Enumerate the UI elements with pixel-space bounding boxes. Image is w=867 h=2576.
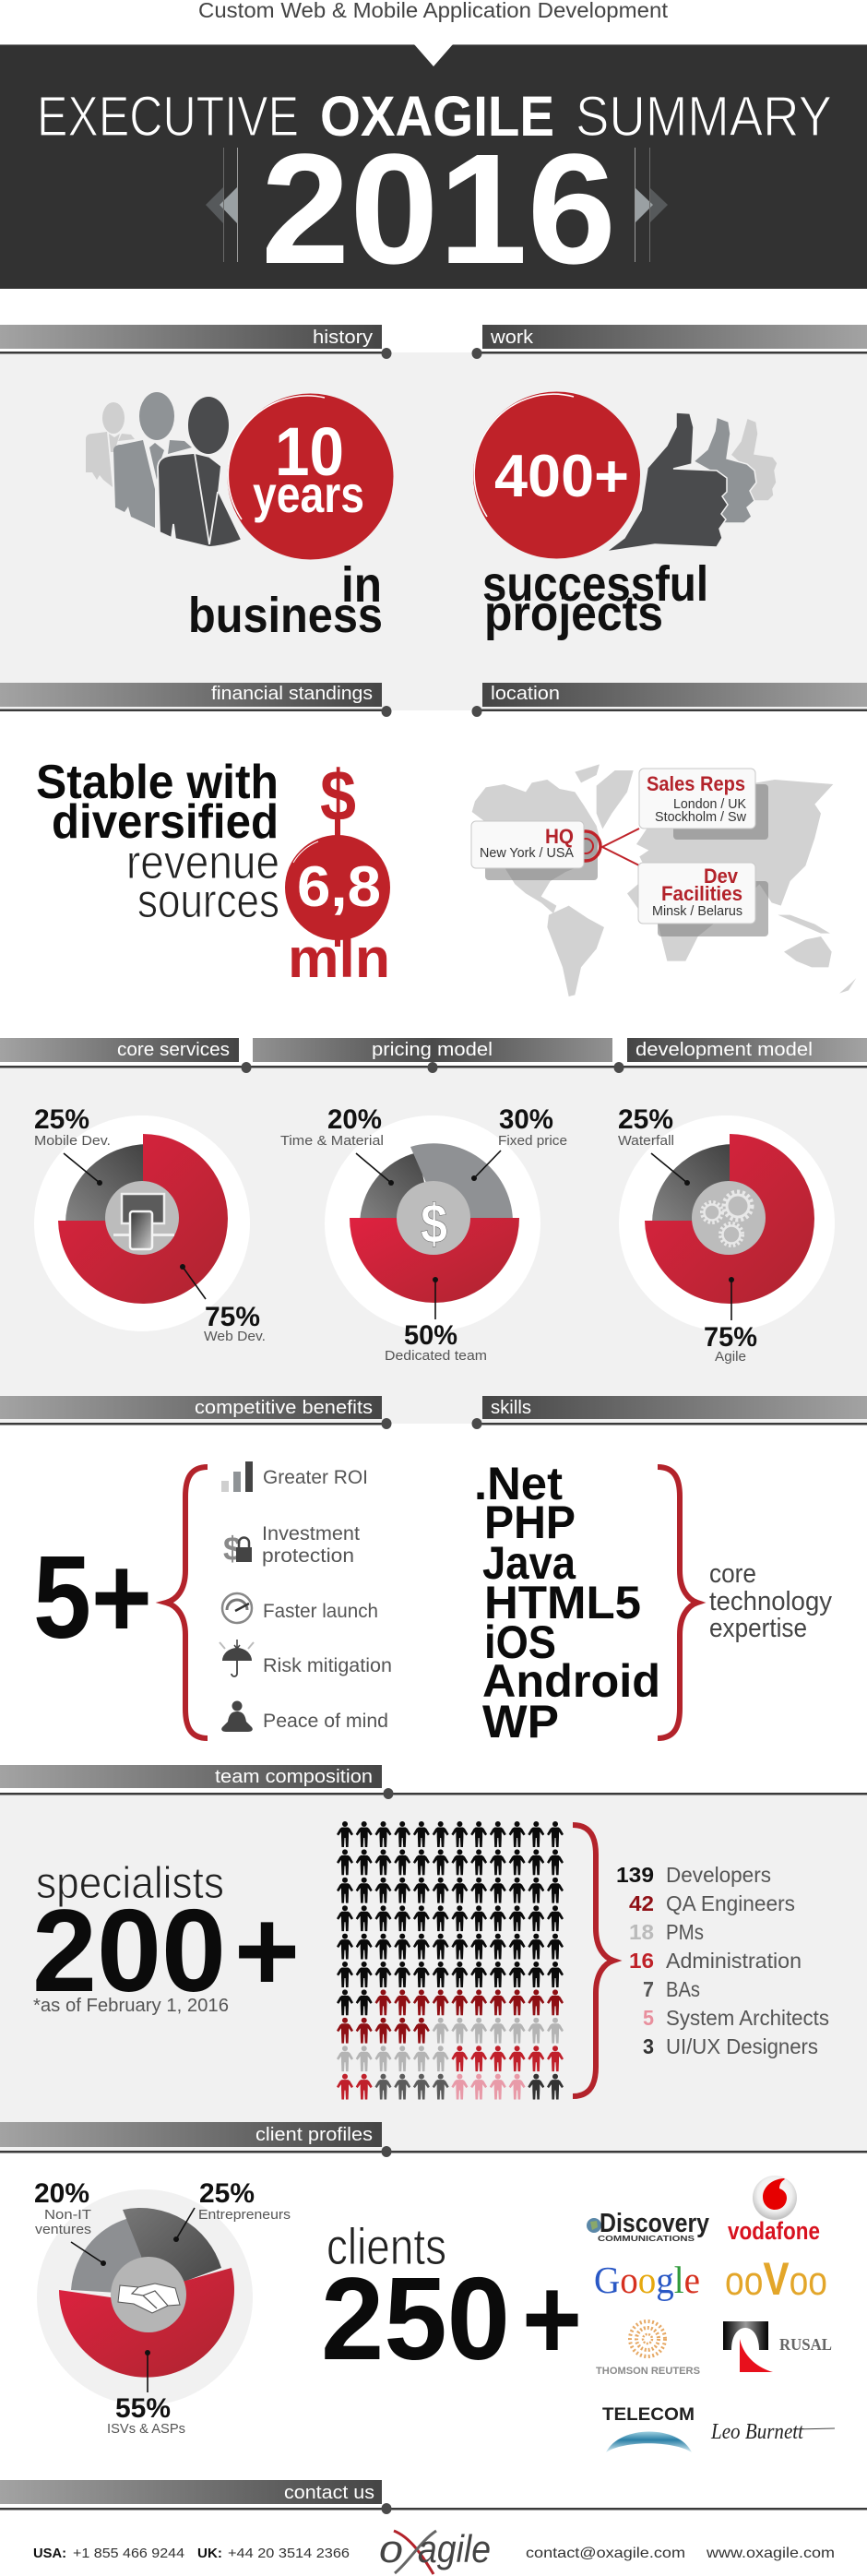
chart: development model xyxy=(618,1104,835,1365)
logo: Vodafone: vodafone xyxy=(728,2217,820,2245)
callout: entrepreneurs: Entrepreneurs xyxy=(198,2207,291,2223)
BAs xyxy=(374,2074,449,2100)
thumb: middle xyxy=(694,417,756,523)
administration xyxy=(337,2045,564,2100)
benefit: investment protection: protection xyxy=(262,1545,354,1567)
text: in business: business xyxy=(188,588,383,643)
team role list: Developers xyxy=(666,1863,771,1887)
text: stable with diversified revenue sources xyxy=(36,756,279,928)
benefit: investment protection: Investment xyxy=(262,1523,360,1544)
grey background: history and work xyxy=(0,352,867,710)
benefit: faster launch xyxy=(222,1593,378,1623)
logo: Vodafone xyxy=(728,2176,820,2245)
callout: web dev xyxy=(180,1264,266,1344)
contact phones: UK: xyxy=(197,2546,222,2561)
text: core technology expertise: expertise xyxy=(709,1614,807,1643)
text: stable with diversified revenue sources: diversified xyxy=(52,795,279,849)
grey background: team xyxy=(0,1794,867,2152)
text: stable with diversified revenue sources: Stable with xyxy=(36,756,279,809)
benefit: risk mitigation: Risk mitigation xyxy=(263,1655,392,1676)
icon: business people xyxy=(86,392,242,547)
contact web: contact@oxagile.com xyxy=(526,2546,685,2561)
title xyxy=(37,85,832,148)
text: specialists 200+ xyxy=(32,1859,300,2016)
skills list: WP xyxy=(482,1696,559,1747)
person: middle xyxy=(113,392,192,528)
connector lines xyxy=(602,829,639,865)
logo: Discovery: COMMUNICATIONS xyxy=(598,2235,695,2243)
callout: sales reps: Sales Reps xyxy=(647,772,745,795)
badge: 10 years xyxy=(225,391,397,563)
callout: mobile dev: Mobile Dev. xyxy=(34,1133,111,1149)
text: specialists 200+: specialists xyxy=(36,1859,224,1908)
team role list: 3 xyxy=(643,2034,654,2058)
person: back xyxy=(86,402,135,487)
section header: work: work xyxy=(490,328,534,348)
text: core technology expertise: technology xyxy=(709,1587,832,1616)
callout: web dev: 75% xyxy=(205,1302,260,1332)
team role list: UI/UX Designers xyxy=(666,2034,818,2058)
callout: HQ: New York / USA xyxy=(480,845,574,861)
logo: Leo Burnett: Leo Burnett xyxy=(710,2420,804,2444)
callout: agile: 75% xyxy=(704,1322,757,1353)
icon: thumbs up xyxy=(606,412,778,552)
benefit: risk mitigation xyxy=(220,1640,392,1676)
logo: ooVoo: ooVoo xyxy=(725,2253,827,2305)
UI/UX designers xyxy=(528,2074,564,2100)
benefit: greater ROI xyxy=(221,1461,368,1492)
logo: Thomson Reuters: THOMSON REUTERS xyxy=(596,2366,700,2377)
team role list: 7 xyxy=(643,1977,654,2001)
title: SUMMARY xyxy=(576,85,832,148)
bracket: skills xyxy=(658,1467,697,1738)
contact phones: +44 20 3514 2366 xyxy=(228,2546,350,2561)
world map xyxy=(472,764,856,996)
callout: agile xyxy=(704,1277,757,1365)
benefit: peace of mind xyxy=(221,1701,388,1732)
bracket: benefits xyxy=(166,1467,208,1738)
text: successful projects xyxy=(482,556,708,641)
pictogram: team xyxy=(337,1821,564,2100)
contact web: www.oxagile.com xyxy=(706,2546,835,2561)
services rule with dots xyxy=(0,1062,867,1073)
team role list: QA Engineers xyxy=(666,1891,795,1915)
text: successful projects: successful xyxy=(482,556,708,612)
revenue badge: 6,8 mln: mln xyxy=(288,927,390,989)
benefit: peace of mind: Peace of mind xyxy=(263,1711,388,1732)
badge: 10 years: 10 xyxy=(275,413,344,490)
person: front xyxy=(158,397,242,547)
PMs xyxy=(337,2018,564,2071)
logo: Rusal xyxy=(723,2321,832,2372)
logo: Google: Google xyxy=(594,2259,700,2301)
text: clients 250+: 250 xyxy=(321,2253,510,2384)
logo: Telecom: TELECOM xyxy=(602,2405,695,2425)
text: in business: in xyxy=(341,557,382,613)
skills list: Java xyxy=(482,1537,576,1589)
logo: Thomson Reuters xyxy=(596,2321,700,2377)
QA engineers xyxy=(337,1989,564,2044)
callout: mobile dev xyxy=(34,1104,111,1186)
title: EXECUTIVE xyxy=(37,85,299,148)
section header: team composition: team composition xyxy=(215,1767,373,1787)
skills list: .Net xyxy=(474,1458,563,1509)
callout: fixed price: Fixed price xyxy=(498,1133,567,1149)
callout: fixed price xyxy=(471,1104,567,1181)
callout: agile: Agile xyxy=(715,1349,746,1365)
year: 2016 xyxy=(261,122,616,297)
contact phones xyxy=(33,2546,350,2561)
skills list: PHP xyxy=(484,1497,576,1548)
logo: Rusal: RUSAL xyxy=(779,2335,832,2354)
logo: Oxagile: o xyxy=(379,2527,403,2570)
icon: dollar: $ xyxy=(421,1193,447,1255)
section header: pricing model: pricing model xyxy=(372,1040,493,1060)
badge: 400+ xyxy=(470,389,642,561)
callout: non-IT ventures xyxy=(34,2178,106,2266)
callout: dev facilities: Minsk / Belarus xyxy=(652,903,742,919)
callout: waterfall: Waterfall xyxy=(618,1133,674,1149)
callout: dedicated team: Dedicated team xyxy=(385,1348,487,1364)
callout: ISVs and ASPs: 55% xyxy=(115,2393,171,2424)
team role list: System Architects xyxy=(666,2006,829,2030)
logo: Oxagile: agile xyxy=(418,2527,491,2570)
team role list: 18 xyxy=(629,1920,654,1944)
text: clients 250+ xyxy=(321,2217,582,2384)
logo: Telecom xyxy=(602,2405,695,2452)
skills list: iOS xyxy=(484,1616,556,1668)
callout: fixed price: 30% xyxy=(499,1104,553,1135)
icon: gears xyxy=(702,1192,752,1246)
logo: Discovery: Discovery xyxy=(600,2209,709,2238)
callout: mobile dev: 25% xyxy=(34,1104,89,1135)
team role list: 42 xyxy=(629,1891,654,1915)
icon: devices xyxy=(113,1194,174,1249)
text: in business xyxy=(188,557,383,643)
text: core technology expertise xyxy=(709,1559,832,1643)
team role list xyxy=(616,1863,829,2058)
benefit: investment protection: $ xyxy=(223,1530,242,1568)
section header: financial standings: financial standings xyxy=(211,684,373,704)
benefit: faster launch: Faster launch xyxy=(263,1601,378,1622)
header band xyxy=(0,44,867,297)
section header: work xyxy=(472,325,867,359)
text: clients 250+: + xyxy=(522,2253,582,2384)
section header: skills xyxy=(472,1396,867,1429)
callout: dev facilities: Dev xyxy=(704,865,739,888)
text: clients 250+: clients xyxy=(327,2217,446,2275)
revenue badge: 6,8 mln xyxy=(285,755,390,989)
revenue badge: 6,8 mln: $ xyxy=(320,755,356,836)
callout: dev facilities xyxy=(638,863,755,924)
section header: pricing model xyxy=(253,1038,612,1062)
team role list: 16 xyxy=(629,1949,654,1973)
section header: financial standings xyxy=(0,683,391,717)
section header: team composition xyxy=(0,1765,867,1799)
callout: dedicated team xyxy=(385,1277,487,1364)
callout: dev facilities: Facilities xyxy=(661,882,742,905)
contact phones: +1 855 466 9244 xyxy=(73,2546,184,2561)
callout: waterfall: 25% xyxy=(618,1104,673,1135)
callout: ISVs and ASPs: ISVs & ASPs xyxy=(107,2421,185,2437)
section header: development model xyxy=(627,1038,867,1062)
callout: web dev: Web Dev. xyxy=(204,1329,266,1344)
section header: development model: development model xyxy=(635,1040,813,1060)
grey background: services xyxy=(0,1067,867,1424)
text: specialists 200+: *as of February 1, 2016 xyxy=(33,1996,229,2016)
callout: non-IT ventures: 20% xyxy=(34,2178,89,2209)
callout: sales reps: Stockholm / Sw xyxy=(655,809,746,825)
big number: 5+: 5+ xyxy=(33,1532,152,1663)
callout: entrepreneurs xyxy=(173,2178,291,2242)
badge: 400+: 400+ xyxy=(494,442,629,509)
callout: HQ xyxy=(471,821,584,868)
logo: Oxagile xyxy=(379,2527,491,2574)
section header: skills: skills xyxy=(491,1398,531,1418)
section header: client profiles xyxy=(0,2122,867,2157)
text: successful projects: projects xyxy=(484,586,663,641)
section header: core services xyxy=(0,1038,239,1062)
section header: client profiles: client profiles xyxy=(255,2125,373,2145)
section header: contact us: contact us xyxy=(284,2483,374,2503)
callout: HQ: HQ xyxy=(545,825,574,848)
callout: dedicated team: 50% xyxy=(404,1320,457,1351)
thumb: back xyxy=(730,418,778,501)
callout: sales reps xyxy=(639,769,755,829)
callout: waterfall xyxy=(618,1104,690,1186)
text: specialists 200+: + xyxy=(234,1885,300,2016)
contact phones: USA: xyxy=(33,2546,66,2561)
thumb: front xyxy=(606,412,728,552)
callout: non-IT ventures: ventures xyxy=(35,2222,91,2237)
section header: history: history xyxy=(313,328,373,348)
callout: time and material: 20% xyxy=(327,1104,382,1135)
HQ target marker xyxy=(571,831,600,861)
team role list: 139 xyxy=(616,1863,654,1887)
contact web xyxy=(526,2546,835,2561)
developers xyxy=(337,1821,564,2015)
benefit: greater ROI: Greater ROI xyxy=(263,1467,368,1488)
skills list xyxy=(474,1458,660,1747)
section header: location: location xyxy=(491,684,560,704)
section header: core services: core services xyxy=(117,1040,230,1060)
section header: history xyxy=(0,325,391,359)
map callout shadows xyxy=(485,784,768,936)
callout: ISVs and ASPs xyxy=(107,2350,185,2437)
team role list: 5 xyxy=(643,2006,654,2030)
revenue badge: 6,8 mln: 6,8 xyxy=(297,855,381,919)
skills list: HTML5 xyxy=(484,1577,641,1628)
section header: contact us xyxy=(0,2480,867,2514)
team role list: Administration xyxy=(666,1949,802,1973)
chart: core services xyxy=(34,1104,266,1344)
team role list: BAs xyxy=(666,1977,700,2001)
callout: sales reps: London / UK xyxy=(673,796,746,812)
section header: competitive benefits xyxy=(0,1396,391,1429)
text: core technology expertise: core xyxy=(709,1559,756,1589)
title: OXAGILE xyxy=(320,85,554,148)
text: stable with diversified revenue sources: revenue xyxy=(126,836,279,889)
year ornaments xyxy=(206,148,668,262)
skills list: Android xyxy=(482,1655,660,1707)
text: stable with diversified revenue sources: sources xyxy=(137,875,279,928)
badge: 10 years: years xyxy=(253,465,364,523)
callout: time and material xyxy=(280,1104,394,1186)
callout: time and material: Time & Material xyxy=(280,1133,384,1149)
chart: client profiles xyxy=(34,2178,291,2437)
text: specialists 200+: 200 xyxy=(32,1885,226,2016)
notch xyxy=(414,44,453,66)
benefit: investment protection xyxy=(223,1523,360,1568)
section header: competitive benefits: competitive benefits xyxy=(195,1398,373,1418)
logo: Discovery xyxy=(587,2209,709,2243)
callout: entrepreneurs: 25% xyxy=(199,2178,255,2209)
team role list: PMs xyxy=(666,1920,704,1944)
chart: pricing model xyxy=(280,1104,567,1364)
system architects xyxy=(451,2074,526,2100)
bracket: team xyxy=(573,1825,613,2096)
icon: handshake xyxy=(118,2284,180,2313)
callout: non-IT ventures: Non-IT xyxy=(44,2207,91,2223)
section header: location xyxy=(472,683,867,717)
